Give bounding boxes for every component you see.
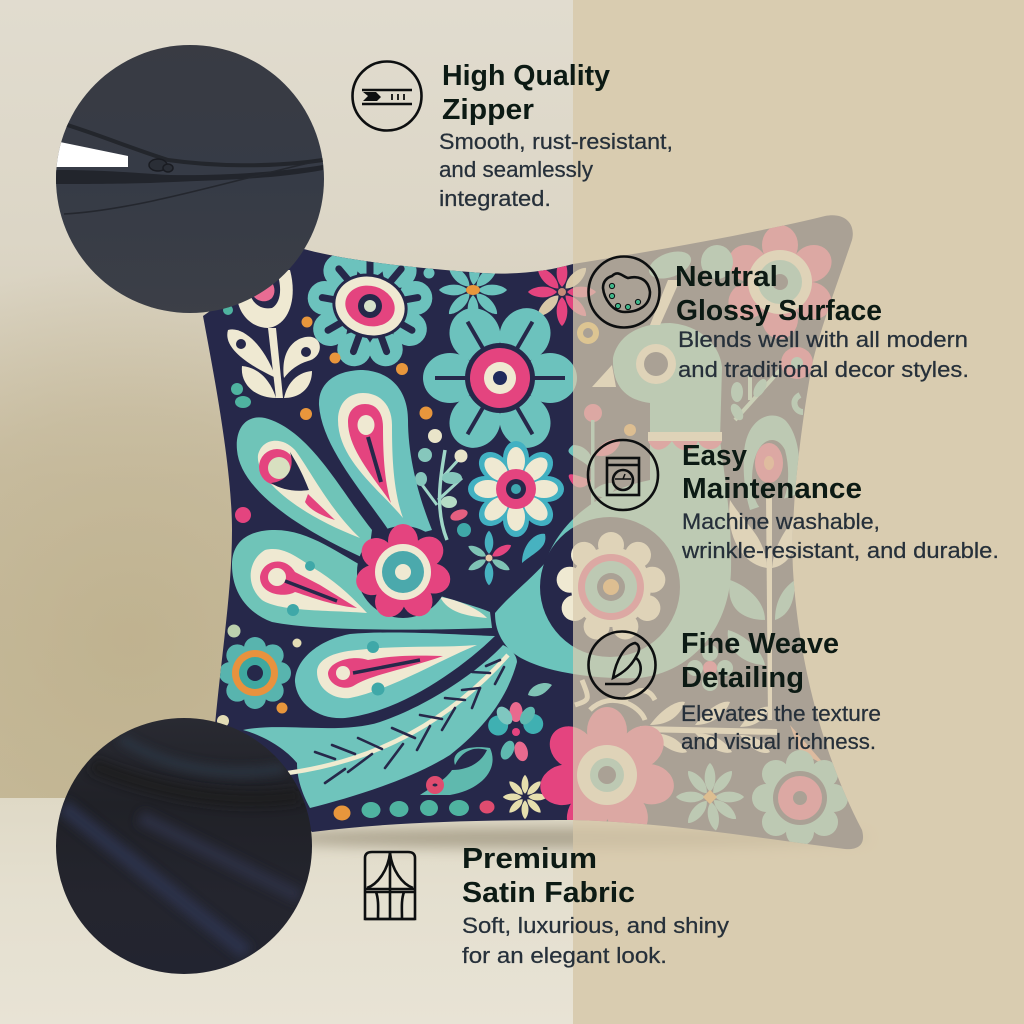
cream arches and leaf spray <box>575 680 825 765</box>
cream daisy <box>468 441 564 537</box>
description line 1: Machine washable, <box>682 509 880 534</box>
heading: high quality zipper: High Quality <box>442 60 610 92</box>
description line 1: Blends well with all modern <box>678 327 968 352</box>
small flower centre of right side <box>687 645 733 691</box>
heading: detailing: Detailing <box>681 662 804 694</box>
paisley feather: upper <box>319 370 432 540</box>
icon: needle <box>588 632 656 698</box>
teal drop <box>522 534 545 563</box>
flower: ring petals top <box>308 256 432 366</box>
feature: fine weave detailing <box>588 628 881 754</box>
heading line 2: Zipper <box>442 94 534 126</box>
feature: high quality zipper <box>352 60 673 211</box>
wall side shading <box>0 250 573 800</box>
zipper pull <box>149 159 173 172</box>
translucent beige overlay <box>573 0 1024 1024</box>
scattered dots <box>217 268 471 727</box>
bottom row of dots <box>334 800 494 820</box>
heading: glossy surface: Glossy Surface <box>676 295 882 327</box>
description line 1: Elevates the texture <box>681 701 881 726</box>
description line 1: Soft, luxurious, and shiny <box>462 913 729 938</box>
centre pink flower <box>353 524 453 622</box>
heading: maintenance: Maintenance <box>682 473 862 505</box>
heading: premium: Premium <box>462 843 597 875</box>
teal and pink small flower <box>467 531 513 585</box>
big teal flower <box>423 308 577 448</box>
teal swirl leaf <box>420 747 493 795</box>
small pink flower <box>426 776 444 794</box>
small teal flower bottom <box>676 763 744 831</box>
paisley feather: left <box>237 417 372 560</box>
feature: premium satin fabric <box>365 843 729 968</box>
small pink star flower <box>528 266 596 326</box>
right tulip plant <box>728 415 801 720</box>
description line 1: Smooth, rust-resistant, <box>439 129 673 154</box>
heading: easy: Easy <box>682 440 747 472</box>
paisley feather: lower <box>295 632 495 718</box>
long feather with stem <box>243 645 517 808</box>
feature: neutral glossy surface <box>588 256 969 382</box>
cream small flower <box>503 775 547 819</box>
teal pink flower lower <box>488 702 544 762</box>
upper right motifs <box>577 245 813 436</box>
tulip plant <box>227 270 320 398</box>
beige panel background right <box>573 0 1024 1024</box>
description line 2: and seamlessly <box>439 157 593 182</box>
description line 2: and visual richness. <box>681 729 876 754</box>
description line 2: wrinkle-resistant, and durable. <box>681 538 999 563</box>
sprig plant <box>415 429 468 540</box>
description line 2: and traditional decor styles. <box>678 357 969 382</box>
small teal star flower <box>439 270 507 314</box>
patterned pillow <box>190 200 880 860</box>
feature: easy maintenance <box>588 440 999 563</box>
icon: washing machine <box>588 440 658 510</box>
heading: satin fabric: Satin Fabric <box>462 877 635 909</box>
description line 3: integrated. <box>439 186 551 211</box>
orange ring flower <box>219 637 291 709</box>
icon: palette <box>588 256 660 328</box>
wall background left <box>0 0 573 800</box>
small pink bud plant <box>569 404 620 505</box>
teal flower bottom right <box>752 750 848 846</box>
heading: fine weave: Fine Weave <box>681 628 839 660</box>
icon: curtains <box>365 852 415 919</box>
bottom pink flower <box>540 707 674 824</box>
heading: neutral: Neutral <box>675 261 778 293</box>
bird body <box>495 323 731 678</box>
scalloped flower in bird <box>555 532 667 643</box>
white lining sliver <box>56 142 128 167</box>
floor background left <box>0 798 573 1024</box>
paisley feather: lower left <box>232 530 492 630</box>
detail circle: zipper <box>50 40 330 320</box>
top right pink flower <box>728 226 832 339</box>
bud top of feather group <box>528 683 552 696</box>
description line 2: for an elegant look. <box>462 943 667 968</box>
pillow shadow <box>250 828 870 848</box>
icon: zipper <box>352 62 422 130</box>
detail circle: satin fabric <box>56 718 312 974</box>
